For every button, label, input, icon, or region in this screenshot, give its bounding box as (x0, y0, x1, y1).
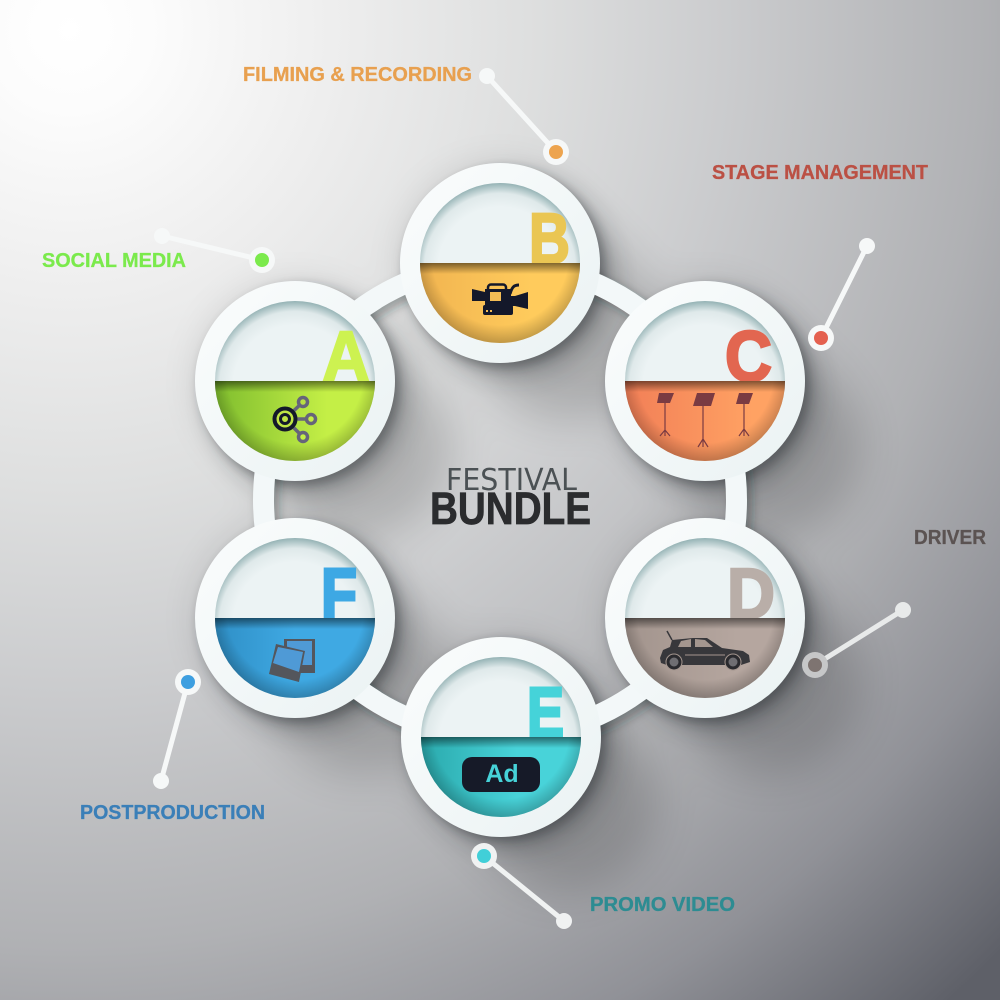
letter F: F (321, 555, 357, 634)
letter C: C (725, 318, 772, 397)
callout B: FILMING & RECORDING (243, 63, 472, 86)
callout F (80, 669, 265, 824)
contact shadows (200, 168, 810, 841)
circle D: driver (605, 518, 805, 718)
callout D (802, 526, 986, 678)
icon: photos (269, 639, 315, 682)
circle C: stage management (605, 281, 805, 481)
callout C: STAGE MANAGEMENT (712, 161, 928, 184)
icon: ad badge: Ad (485, 760, 519, 788)
soft long shadows (295, 263, 770, 801)
callout A: SOCIAL MEDIA (42, 249, 186, 272)
circle E: promo video (401, 637, 601, 837)
icon: video camera (472, 284, 528, 315)
connecting ring (264, 264, 742, 742)
letter D: D (727, 555, 775, 634)
callout C (712, 161, 928, 351)
medium shadows (209, 177, 819, 850)
letter E: E (527, 674, 564, 753)
callout B (243, 63, 569, 165)
icon: ad badge (462, 757, 540, 792)
callout F: POSTPRODUCTION (80, 801, 265, 824)
callout E: PROMO VIDEO (590, 893, 735, 916)
letter A: A (322, 318, 370, 397)
callout D: DRIVER (914, 526, 986, 549)
callout E (471, 843, 735, 929)
title: BUNDLE (430, 483, 591, 534)
circle A: social media (195, 281, 395, 481)
icon: network target (272, 398, 316, 442)
icon: music stands (657, 393, 753, 447)
title (430, 463, 591, 534)
letter B: B (529, 200, 570, 279)
circle F: postproduction (195, 518, 395, 718)
callout A (42, 228, 275, 273)
icon: car (660, 631, 750, 670)
circle B: filming and recording (400, 163, 600, 363)
title: FESTIVAL (446, 463, 577, 498)
